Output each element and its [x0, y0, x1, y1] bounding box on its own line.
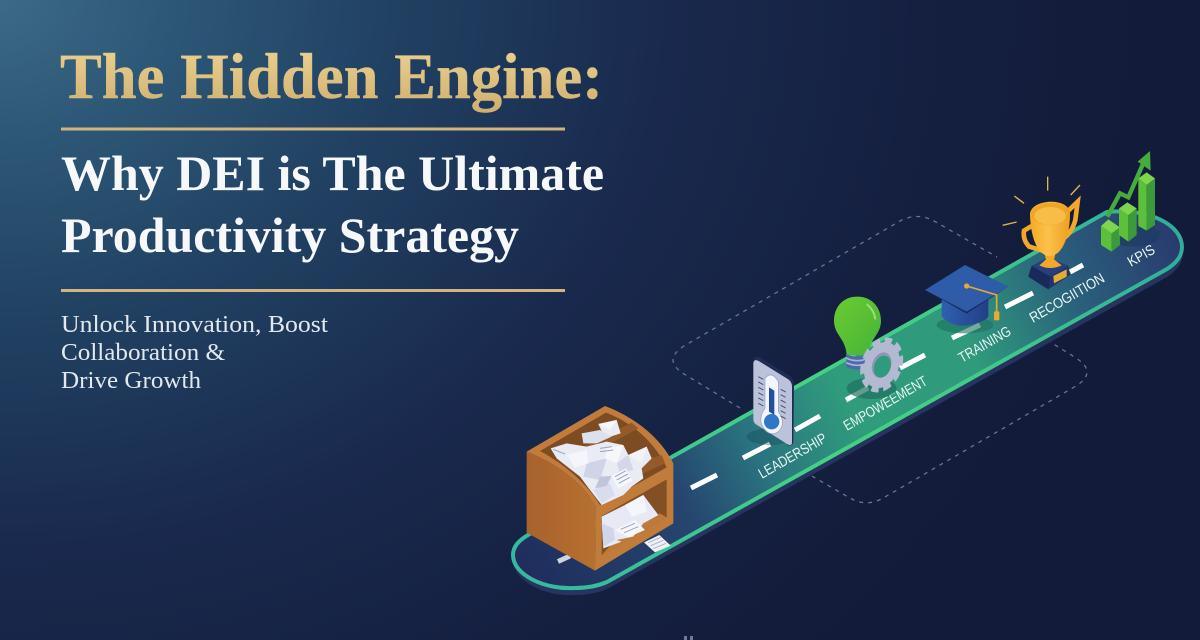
- papers lower: [602, 495, 658, 548]
- label: LEADERSHIP: LEADERSHIP: [756, 431, 830, 482]
- label: TRAINING: TRAINING: [956, 324, 1014, 366]
- bar 3: [1138, 178, 1147, 231]
- icon: KPI bar chart with arrow: [1101, 151, 1160, 252]
- lower opening: [602, 479, 667, 555]
- subtitle: Why DEI is The Ultimate: [61, 145, 604, 201]
- cap body: [942, 297, 988, 326]
- subtitle: [61, 145, 604, 263]
- cup: [1030, 202, 1070, 256]
- bar 2: [1119, 208, 1128, 242]
- icon: trophy: [1003, 177, 1080, 289]
- upper opening: [540, 413, 667, 505]
- road surface: [513, 211, 1182, 588]
- gear: [856, 335, 907, 395]
- gold divider bottom: [61, 289, 565, 292]
- tagline: Unlock Innovation, Boost: [61, 312, 328, 338]
- bottom edge marks: [684, 636, 693, 640]
- title: The Hidden Engine: The Hidden Engine:: [60, 41, 603, 113]
- label: EMPOWEEMENT: EMPOWEEMENT: [841, 374, 931, 434]
- trophy base: [1028, 257, 1070, 289]
- panel face: [753, 360, 792, 445]
- handles: [1024, 202, 1078, 251]
- tassel: [967, 286, 997, 313]
- stem and foot: [1039, 252, 1062, 268]
- bar 1: [1101, 226, 1112, 252]
- growth arrow: [1107, 162, 1144, 217]
- shadow: [747, 428, 793, 445]
- mortarboard edge: [925, 287, 1008, 314]
- dashed isometric outline: [673, 216, 1087, 503]
- road: [513, 211, 1183, 595]
- tagline: Drive Growth: [61, 368, 201, 394]
- panel edge: [753, 357, 794, 446]
- tagline: [61, 312, 328, 394]
- icon: wooden cabinet of crumpled paper: [527, 406, 673, 571]
- bulb base: [846, 354, 869, 369]
- cabinet side: [527, 452, 596, 571]
- shadow: [1107, 223, 1160, 247]
- plaque: [1053, 269, 1067, 283]
- label: KPIS: KPIS: [1125, 242, 1158, 270]
- road underside: [513, 240, 1183, 595]
- icon: graduation cap: [925, 265, 1008, 333]
- shadow: [847, 378, 897, 399]
- subtitle: Productivity Strategy: [61, 207, 519, 263]
- cup rim: [1031, 203, 1069, 225]
- shadow: [937, 317, 993, 333]
- icon: light bulb and gear: [834, 297, 907, 399]
- cabinet front frame: [527, 406, 673, 571]
- lane dashes: [558, 265, 1083, 562]
- bulb glass: [834, 297, 881, 355]
- mortarboard: [925, 265, 1008, 312]
- tagline: Collaboration &: [61, 340, 225, 366]
- gold divider top: [61, 128, 565, 130]
- icon: thermometer: [747, 357, 794, 446]
- paper on road: [644, 535, 671, 552]
- papers upper: [551, 420, 652, 505]
- rays: [1003, 177, 1080, 225]
- gauge: [761, 375, 782, 434]
- label: RECOGIITION: RECOGIITION: [1027, 271, 1108, 326]
- tick marks: [758, 377, 786, 419]
